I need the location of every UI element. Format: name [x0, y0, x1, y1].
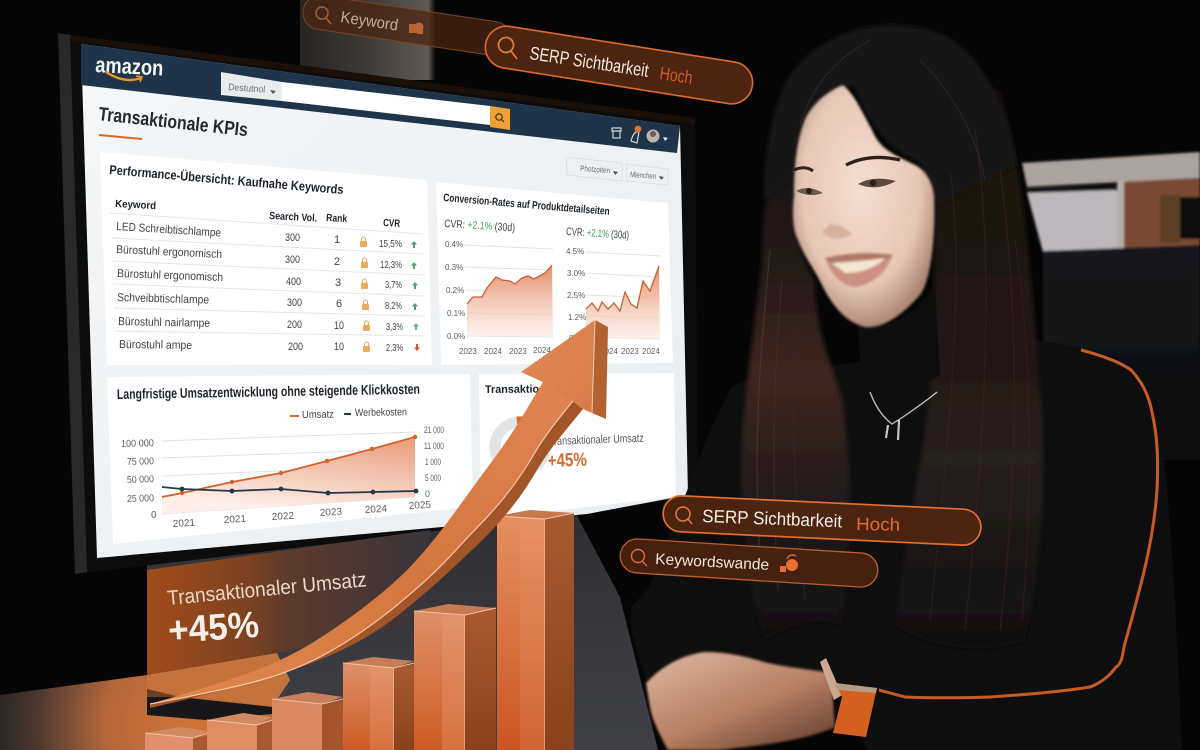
icons: locks [360, 237, 370, 352]
combo line chart: 2022 [272, 511, 295, 523]
panel heading: Langfristige Umsatzentwicklung ohne steigende Klickkosten [117, 381, 420, 402]
line chart: right CVR: CVR: +2.1% (30d) [566, 226, 629, 242]
woman [631, 25, 1182, 750]
table rows: 200 [288, 341, 303, 353]
necklace [870, 392, 937, 440]
search pill: SERP Sichtbarkeit lower: SERP Sichtbarkeit [702, 506, 843, 531]
growth arrow [150, 320, 608, 708]
watch [820, 658, 877, 737]
table header: Rank [326, 212, 348, 225]
hair left [742, 110, 850, 640]
line chart: right CVR: 4.5% [566, 247, 584, 256]
legend: Umsatz [302, 409, 334, 421]
search input [282, 82, 490, 125]
line chart: right CVR: 3.0% [567, 269, 585, 278]
line chart: left CVR: 0.3% [445, 263, 463, 272]
mouth [825, 253, 893, 287]
table rows: 300 [285, 232, 300, 244]
icon: archive [612, 128, 621, 138]
panel: transactional revenue donut: Transaktionaler [485, 383, 566, 396]
line chart: right CVR: 1.2% [568, 313, 586, 322]
panel: long-term revenue [107, 374, 473, 544]
arrowhead face [521, 320, 595, 413]
panel: transactional revenue donut: +45% [547, 450, 587, 472]
table rows: 2,3% [386, 342, 403, 354]
combo line chart [121, 425, 444, 530]
hand [646, 652, 835, 750]
donut chart [495, 422, 545, 472]
search pill: SERP Sichtbarkeit lower: Hoch [856, 514, 900, 535]
3D bar chart [145, 510, 574, 750]
search pill: SERP Sichtbarkeit top: Hoch [658, 63, 694, 88]
line chart: left CVR: 2023 [459, 347, 477, 356]
combo line chart: 100 000 [121, 438, 154, 450]
line chart: left CVR: CVR: +2.1% (30d) [444, 218, 515, 234]
arrow shaft face [150, 370, 590, 704]
table rows: 3,7% [385, 279, 402, 291]
line chart: left CVR: 2023 [509, 347, 527, 356]
combo line chart: 2025 [409, 500, 432, 512]
table rows: 3 [335, 277, 341, 289]
arrowhead side [592, 320, 608, 419]
legend: Werbekosten [355, 406, 407, 419]
combo line chart: 5 000 [425, 473, 441, 483]
line chart: right CVR: 2023 [578, 347, 596, 356]
combo line chart: 75 000 [127, 456, 154, 468]
line chart: left CVR: 2024 [533, 346, 551, 355]
amazon nav bar [81, 44, 680, 153]
table rows: 2 [334, 256, 340, 268]
panel: conversion rates [436, 182, 673, 365]
table rows: 12,3% [380, 259, 402, 271]
panel: transactional revenue donut [479, 373, 676, 519]
table header [115, 198, 401, 230]
search pill: SERP Sichtbarkeit lower [662, 495, 982, 546]
combo line chart: 2024 [365, 504, 388, 516]
combo line chart: 50 000 [127, 474, 154, 486]
panel: keyword table [100, 152, 432, 365]
line chart: left CVR: 0.0% [447, 332, 465, 341]
nose [822, 224, 852, 239]
line chart: left CVR [444, 218, 553, 356]
turtleneck [860, 285, 940, 388]
sleeve stripe [879, 350, 1158, 698]
hair strands [757, 40, 1029, 630]
bar 3 [272, 692, 343, 750]
combo line chart: 2021 [224, 514, 247, 526]
line chart: right CVR [566, 226, 660, 356]
laptop back [147, 512, 658, 750]
background bookshelf [1022, 152, 1200, 460]
combo line chart: 2021 [173, 518, 196, 530]
hair top [764, 25, 1017, 205]
line chart: right CVR: 2024 [600, 347, 618, 356]
table rows: 3,3% [386, 321, 403, 333]
table header: Keyword [115, 198, 156, 212]
icon: bell [631, 126, 641, 143]
line chart: right CVR: 2.5% [567, 291, 585, 300]
search pill: Keywordswande: Keywordswande [655, 551, 770, 574]
table rows: 200 [287, 319, 302, 331]
search pill: Keywordswande [619, 538, 879, 588]
table header: CVR [383, 217, 401, 230]
search pill: Keyword [301, 0, 513, 58]
combo line chart: 2023 [320, 507, 343, 519]
table rows: Bürostuhl nairlampe [118, 316, 210, 330]
table rows: Bürostuhl ergonomisch [117, 268, 223, 284]
search dropdown: Destutnol [228, 82, 265, 96]
search pill: SERP Sichtbarkeit top [482, 23, 756, 107]
icon: tag cluster [780, 555, 798, 572]
line chart: left CVR: 0.1% [447, 309, 465, 318]
combo line chart: 25 000 [127, 493, 154, 505]
monitor bezel [58, 33, 698, 574]
table rows: 300 [287, 297, 302, 309]
line chart: right CVR: 2024 [642, 347, 660, 356]
filter buttons: Mlenchen [630, 170, 656, 181]
eyes [796, 188, 823, 195]
search dropdown [221, 72, 282, 101]
arrow shaft underside [150, 401, 583, 708]
table rows: 8,2% [385, 300, 402, 312]
table rows [116, 221, 403, 354]
bar 6 [497, 510, 574, 750]
glass panel: transactional revenue [147, 530, 430, 720]
line chart: right CVR: 0 [569, 334, 574, 343]
line chart: left CVR: 2024 [484, 347, 502, 356]
combo line chart: 11 000 [424, 441, 444, 451]
table rows: 300 [285, 254, 300, 266]
callout label: Transaktionaler Umsatz [166, 568, 368, 610]
sweater body [631, 325, 1182, 750]
filter buttons [566, 157, 668, 185]
table rows: 15,5% [379, 238, 402, 250]
search button [490, 106, 510, 130]
table rows: 10 [334, 341, 344, 353]
combo line chart: 21 000 [424, 425, 444, 435]
line chart: left CVR: 0.2% [446, 286, 464, 295]
desk [0, 675, 310, 750]
amazon logo: amazon [95, 52, 164, 81]
line chart: left CVR: 0.4% [445, 240, 463, 249]
bar 5 [414, 604, 496, 750]
combo line chart: 1 000 [425, 457, 441, 467]
bar 1 [145, 727, 207, 750]
panel: transactional revenue donut: Transaktionaler Umsatz [549, 433, 644, 448]
table rows: Bürostuhl ergonomisch [116, 244, 222, 261]
filter buttons: Photzoiten [580, 164, 610, 175]
callout value: +45% [167, 604, 260, 651]
line chart: right CVR: 2023 [621, 347, 639, 356]
table rows: 6 [336, 298, 342, 310]
search pill: Keyword: Keyword [339, 9, 399, 35]
search pill: SERP Sichtbarkeit top: SERP Sichtbarkeit [528, 42, 650, 81]
panel heading: Performance-Übersicht: Kaufnahe Keywords [109, 162, 344, 197]
combo line chart: 0 [425, 489, 430, 499]
table rows: LED Schreibtischlampe [116, 221, 221, 240]
icons: trend arrows [411, 241, 420, 351]
table rows: 1 [334, 234, 340, 246]
bar 4 [343, 657, 414, 750]
monitor [58, 33, 698, 574]
table header: Search Vol. [269, 210, 317, 225]
table rows: Schveibbtischlampe [117, 292, 209, 307]
table rows: Bürostuhl ampe [119, 339, 192, 352]
heading: Transaktionale KPIs: Transaktionale KPIs [97, 104, 249, 141]
brows [794, 168, 813, 171]
bar 2 [207, 713, 272, 750]
combo line chart: 0 [151, 510, 157, 521]
monitor screen [81, 44, 688, 558]
hair right [895, 60, 1043, 648]
icon: avatar [646, 130, 668, 142]
icon: tag cluster [409, 22, 424, 34]
table rows: 10 [334, 320, 344, 332]
panel heading: Conversion-Rates auf Produktdetailseiten [443, 192, 610, 218]
legend [290, 406, 407, 421]
face [793, 85, 934, 327]
table rows: 400 [286, 276, 301, 288]
